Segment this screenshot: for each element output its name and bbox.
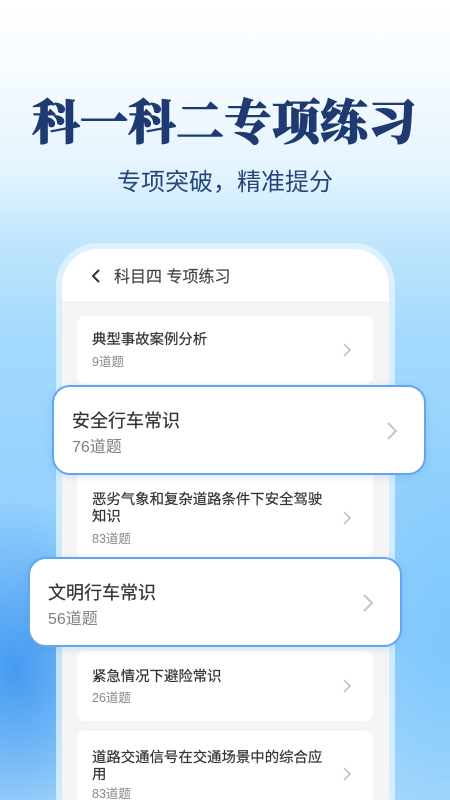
question count: 83道题 <box>92 532 131 546</box>
card title: 知识 <box>92 508 121 524</box>
card: traffic signals <box>77 731 373 800</box>
phone header <box>62 249 389 301</box>
card: emergency avoidance <box>77 651 373 721</box>
icon: chevron <box>344 512 351 524</box>
subtitle: 专项突破，精准提分 <box>117 169 333 196</box>
icon: back arrow <box>92 269 100 283</box>
icon: chevron <box>363 594 374 612</box>
card title: 道路交通信号在交通场景中的综合应 <box>92 750 322 766</box>
highlight count: 56道题 <box>48 611 98 628</box>
card: bad weather driving <box>77 470 373 557</box>
title: 科一科二专项练习 <box>32 97 416 150</box>
icon: chevron <box>387 422 398 440</box>
card title: 恶劣气象和复杂道路条件下安全驾驶 <box>92 492 322 508</box>
question count: 26道题 <box>92 691 131 705</box>
card title: 典型事故案例分析 <box>92 332 207 348</box>
highlight title: 文明行车常识 <box>48 583 156 603</box>
card title <box>92 492 322 524</box>
highlight count: 76道题 <box>72 439 122 456</box>
highlight card: civilized driving <box>28 557 402 647</box>
panel: phone mockup <box>56 243 395 800</box>
icon: chevron <box>344 344 351 356</box>
icon: chevron <box>344 680 351 692</box>
card: typical accident cases <box>77 316 373 384</box>
card title: 紧急情况下避险常识 <box>92 669 222 685</box>
highlight card: safe driving <box>52 385 426 475</box>
question count: 9道题 <box>92 355 124 369</box>
card title <box>92 750 322 782</box>
icon: chevron <box>344 768 351 780</box>
card title: 用 <box>92 766 106 782</box>
header title: 科目四 专项练习 <box>114 269 230 286</box>
highlight title: 安全行车常识 <box>72 411 180 431</box>
